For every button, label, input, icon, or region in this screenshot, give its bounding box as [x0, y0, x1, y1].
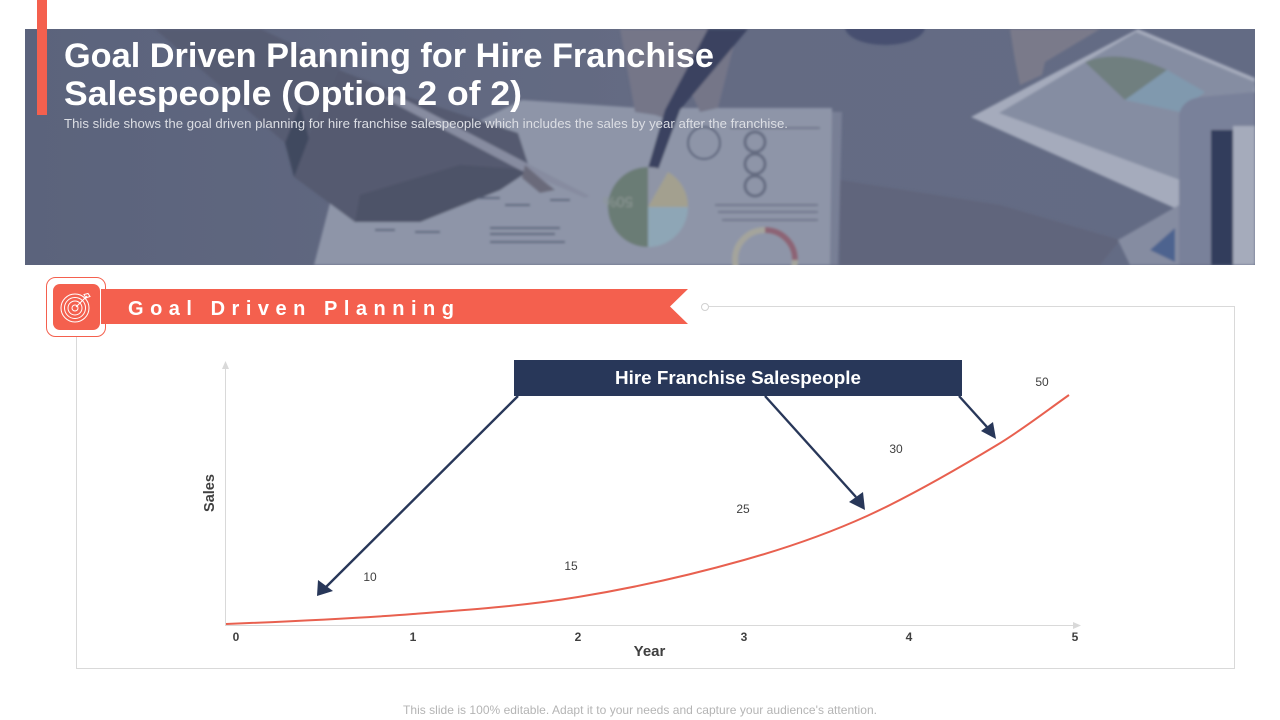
- banner photo: desk with hands, charts and tablet: 50%: [603, 193, 633, 210]
- data labels: 10: [363, 570, 377, 584]
- x axis ticks: 0: [233, 630, 240, 644]
- banner photo: desk with hands, charts and tablet: [25, 29, 1255, 265]
- arrow to year 0.5: [317, 396, 518, 596]
- axes: [222, 361, 1081, 629]
- x axis ticks: 4: [906, 630, 913, 644]
- section ribbon: Goal Driven Planning: [128, 298, 454, 320]
- accent bar: [37, 0, 47, 115]
- x axis ticks: 1: [410, 630, 417, 644]
- section ribbon: [101, 289, 688, 324]
- title: Goal Driven Planning for Hire Franchise: [64, 37, 714, 75]
- data labels: 25: [736, 502, 750, 516]
- x axis ticks: 2: [575, 630, 582, 644]
- mug: [844, 29, 926, 46]
- tablet: [971, 29, 1255, 210]
- donut chart: [732, 226, 798, 265]
- callout: Hire Franchise Salespeople: Hire Franchise Salespeople: [615, 368, 861, 388]
- data labels: 50: [1035, 375, 1049, 389]
- arrow to year 3.7: [765, 396, 865, 510]
- footer note: This slide is 100% editable. Adapt it to your needs and capture your audience's attention.: [403, 703, 877, 717]
- icon frame: [46, 278, 106, 336]
- sweater sleeve: [155, 29, 345, 177]
- chart panel frame: [76, 304, 1234, 668]
- x axis ticks: 3: [741, 630, 748, 644]
- data labels: [363, 375, 1049, 584]
- icon: target: [53, 284, 100, 330]
- pie chart on paper: [648, 165, 659, 171]
- y axis title: Sales: [202, 474, 218, 512]
- title: Salespeople (Option 2 of 2): [64, 75, 522, 113]
- x axis ticks: 5: [1072, 630, 1079, 644]
- pen: [384, 95, 590, 198]
- callout: Hire Franchise Salespeople: [514, 360, 962, 396]
- subtitle: This slide shows the goal driven planning for hire franchise salespeople which includes the sales by year after the franchise.: [64, 116, 788, 131]
- top hand: [620, 29, 738, 120]
- x axis title: Year: [634, 643, 666, 660]
- data labels: 30: [889, 442, 903, 456]
- paper sheet: [830, 112, 842, 265]
- title: [64, 37, 714, 113]
- arrow to year 4.5: [959, 396, 996, 439]
- sales growth curve: [226, 395, 1069, 624]
- small radial icons: [688, 127, 720, 159]
- phone: [1179, 92, 1255, 265]
- data labels: 15: [564, 559, 578, 573]
- hand on tablet: [1010, 29, 1100, 85]
- hand holding pen: [294, 70, 530, 222]
- x axis ticks: [233, 630, 1079, 644]
